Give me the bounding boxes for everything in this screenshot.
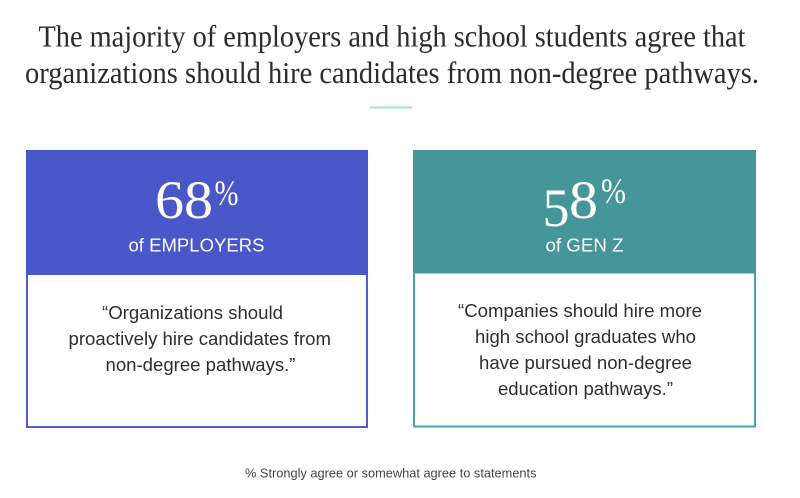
panel: gen z [413,150,756,426]
stat: 58 percent: 5 [542,178,570,238]
accent rule [370,106,412,108]
employers quote [68,303,331,375]
employers quote: non-degree pathways.” [106,355,296,375]
stat: 58 percent [542,170,626,238]
employers header [26,150,368,275]
stat: 58 percent: 8 [569,170,598,230]
label: of employers: of EMPLOYERS [128,236,264,256]
employers quote: proactively hire candidates from [68,329,331,349]
title [25,18,759,90]
stat: 68 percent [155,170,238,230]
gen z quote: high school graduates who [475,327,696,347]
label: of gen z: of GEN Z [546,236,624,256]
title: The majority of employers and high school students agree that [38,18,746,54]
gen z quote: “Companies should hire more [458,301,702,321]
gen z quote: education pathways.” [498,379,673,399]
stat: 68 percent: % [214,173,238,213]
panel: employers [26,150,368,427]
footnote: % Strongly agree or somewhat agree to statements [245,466,536,480]
gen z quote: have pursued non-degree [479,353,692,373]
stat: 58 percent: % [601,171,626,211]
stat: 68 percent: 68 [155,170,213,230]
employers quote: “Organizations should [102,303,283,323]
gen z quote [458,301,702,399]
gen z header [413,150,756,274]
